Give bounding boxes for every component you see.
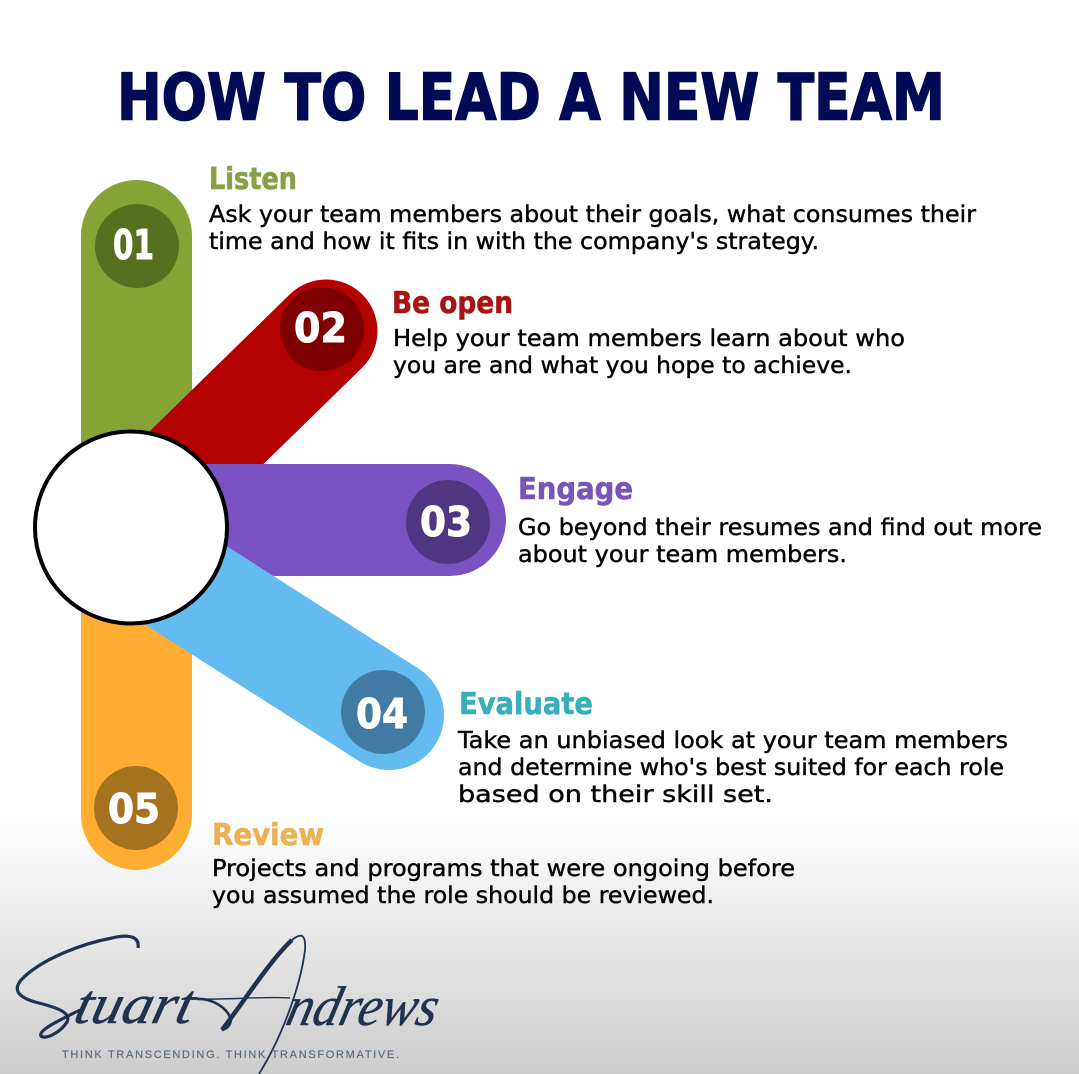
badge 03: 03: [420, 498, 472, 546]
badge 04: 04: [356, 690, 408, 738]
pill 05 orange: [81, 520, 192, 870]
step 1 text: time and how it fits in with the company's strategy.: [209, 227, 819, 255]
step 3 text: [518, 472, 1042, 568]
signature logo: [17, 936, 446, 1074]
step 5 text: Review: [212, 818, 324, 853]
badge 05: [94, 766, 178, 850]
pill 04 blue: [140, 556, 389, 715]
badge 04: [341, 670, 425, 754]
step 5 text: [212, 818, 795, 909]
step 3 text: Engage: [518, 472, 633, 507]
step 4 text: based on their skill set.: [458, 780, 773, 808]
signature logo: THINK TRANSCENDING. THINK TRANSFORMATIVE.: [62, 1049, 399, 1061]
badge 02: [280, 287, 364, 371]
central circle: [35, 432, 227, 624]
badge 02: 02: [294, 304, 347, 352]
step 3 text: Go beyond their resumes and find out more: [518, 513, 1042, 541]
step 5 text: Projects and programs that were ongoing before: [212, 854, 795, 882]
signature logo: ndrews: [281, 976, 446, 1038]
badge 01: [95, 204, 179, 288]
step 1 text: Listen: [209, 162, 297, 197]
step 4 text: and determine who's best suited for each role: [458, 753, 1004, 781]
badge 03: [406, 480, 490, 564]
step 4 text: [457, 687, 1008, 808]
step 2 text: you are and what you hope to achieve.: [393, 351, 852, 379]
step 2 text: Be open: [392, 286, 513, 321]
pill 02 red: [156, 331, 326, 497]
step 3 text: about your team members.: [518, 540, 847, 568]
step 1 text: Ask your team members about their goals, what consumes their: [209, 200, 976, 228]
step 2 text: Help your team members learn about who: [393, 324, 905, 352]
signature logo: tuart: [69, 974, 204, 1036]
step 4 text: Take an unbiased look at your team members: [457, 726, 1008, 754]
step 2 text: [392, 286, 905, 379]
badge 01: 01: [113, 221, 154, 269]
badge 05: 05: [108, 785, 160, 833]
step 4 text: Evaluate: [459, 687, 593, 722]
step 1 text: [209, 162, 976, 255]
pill 01 green: [81, 180, 192, 540]
pill 03 purple: [150, 464, 506, 576]
step 5 text: you assumed the role should be reviewed.: [212, 881, 714, 909]
